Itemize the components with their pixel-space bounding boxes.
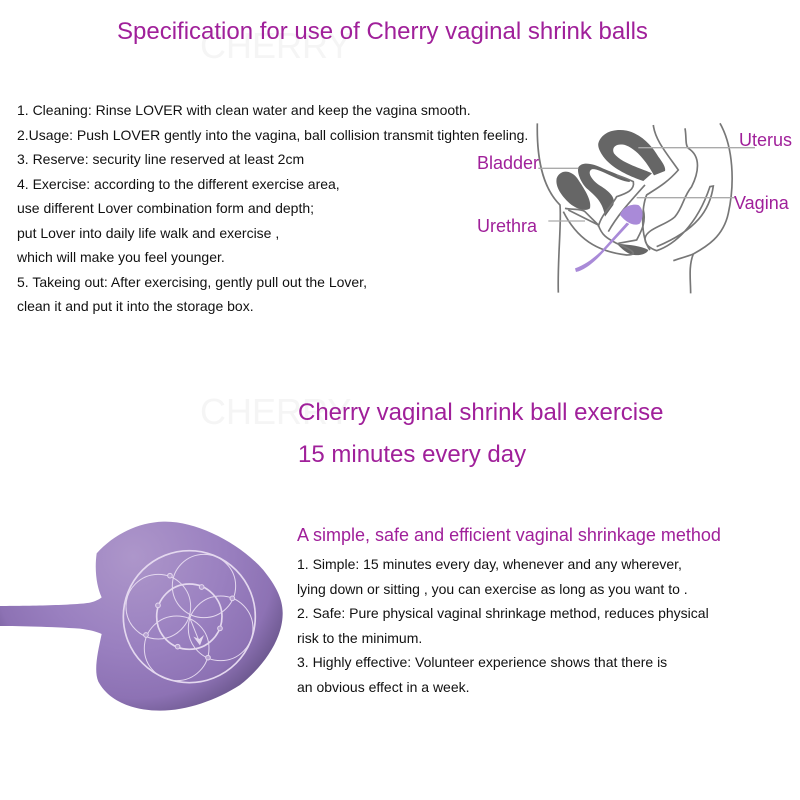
heading: exercise: Cherry vaginal shrink ball exercise	[298, 399, 663, 426]
instructions text block: use different Lover combination form and depth;	[17, 200, 314, 216]
benefits text block: 1. Simple: 15 minutes every day, whenever and any wherever,	[297, 556, 682, 572]
benefits text block: an obvious effect in a week.	[297, 679, 470, 695]
ball in diagram	[575, 205, 643, 272]
benefits text block: lying down or sitting , you can exercise as long as you want to .	[297, 581, 688, 597]
instructions text block: 4. Exercise: according to the different exercise area,	[17, 176, 340, 192]
body outlines	[537, 123, 732, 293]
benefits text block: risk to the minimum.	[297, 630, 422, 646]
product illustration: ball	[0, 522, 283, 711]
benefits text block	[297, 556, 709, 695]
benefits text block: 2. Safe: Pure physical vaginal shrinkage method, reduces physical	[297, 605, 709, 621]
organ: bladder, uterus and rectum shapes	[556, 130, 665, 255]
instructions text block: clean it and put it into the storage box.	[17, 298, 254, 314]
subheading: method: A simple, safe and efficient vaginal shrinkage method	[297, 525, 721, 545]
benefits text block: 3. Highly effective: Volunteer experience shows that there is	[297, 654, 667, 670]
instructions text block: 1. Cleaning: Rinse LOVER with clean water and keep the vagina smooth.	[17, 102, 471, 118]
leader lines	[538, 148, 755, 221]
instructions text block: put Lover into daily life walk and exercise ,	[17, 225, 279, 241]
instructions text block: which will make you feel younger.	[17, 249, 225, 265]
title: Specification for use of Cherry vaginal shrink balls	[117, 18, 648, 45]
instructions text block: 2.Usage: Push LOVER gently into the vagina, ball collision transmit tighten feeling.	[17, 127, 528, 143]
faint background word: top: CHERRY	[200, 25, 351, 66]
label: Vagina: Vagina	[734, 193, 789, 213]
heading: exercise	[298, 399, 663, 468]
label: Urethra: Urethra	[477, 216, 537, 236]
heading: exercise: 15 minutes every day	[298, 441, 526, 468]
label: Bladder: Bladder	[477, 153, 539, 173]
engraved pattern	[123, 551, 255, 683]
instructions text block	[17, 102, 528, 314]
label: Uterus: Uterus	[739, 130, 792, 150]
anatomy diagram	[536, 122, 755, 294]
instructions text block: 3. Reserve: security line reserved at least 2cm	[17, 151, 304, 167]
faint background word: middle: CHERRY	[200, 391, 351, 432]
instructions text block: 5. Takeing out: After exercising, gently pull out the Lover,	[17, 274, 367, 290]
ball body and stem	[0, 522, 283, 711]
